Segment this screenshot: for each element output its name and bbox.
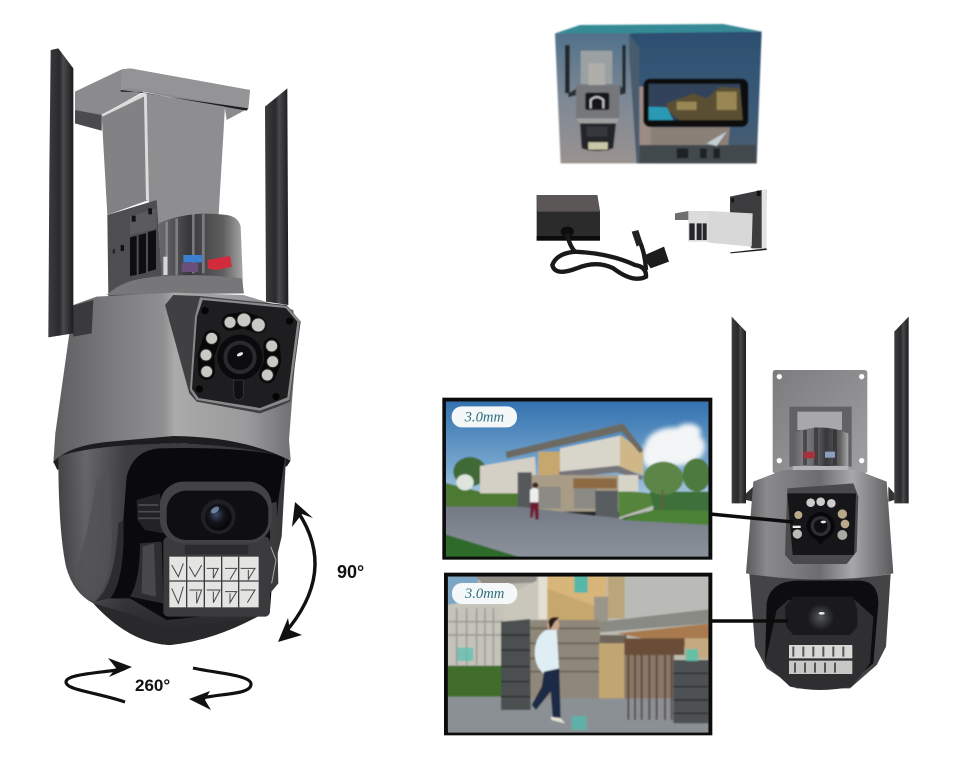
upper lens [217, 335, 263, 400]
left antenna [48, 48, 93, 337]
main camera: dual lens PTZ [48, 48, 301, 645]
front glass dome [793, 427, 848, 477]
box side face [555, 33, 639, 163]
adapter block [537, 195, 600, 241]
lower telephoto lens housing [160, 482, 272, 617]
label: 260°: 260° [135, 676, 170, 695]
ground [443, 697, 712, 737]
box camera picture [565, 45, 626, 151]
person near [532, 617, 565, 723]
front wall plate [773, 370, 867, 473]
box building picture [639, 127, 757, 163]
power adapter and cable [537, 195, 669, 279]
power plug [643, 247, 669, 268]
product box [555, 24, 762, 163]
connector line: bottom lens to zoomed view [712, 619, 788, 623]
front lower dome [749, 574, 891, 690]
infrared LEDs [200, 313, 279, 381]
connector line: top lens to wide view [710, 514, 793, 522]
box top flap [555, 24, 762, 34]
upper wide-angle camera module [165, 295, 301, 413]
box front face [630, 32, 762, 163]
white LED floodlight panel [169, 557, 259, 607]
LED backing [206, 320, 273, 375]
box smartphone picture [643, 79, 748, 127]
focal length badge top [452, 406, 517, 427]
right antenna [265, 88, 288, 305]
power cable [552, 233, 646, 279]
panel: zoomed view 3.0mm [443, 573, 712, 737]
wall mount bracket [75, 68, 250, 297]
label: 90°: 90° [337, 562, 364, 582]
panel: wide view 3.0mm [443, 398, 712, 560]
upper body housing [53, 293, 297, 470]
lower rotating dome [58, 443, 286, 645]
tilt arrow: 90 degrees [278, 502, 364, 642]
pan arrows: 260 degrees [66, 658, 251, 710]
front upper body [746, 470, 893, 580]
glass dome with indicator lights [107, 214, 244, 295]
spare mounting bracket [675, 189, 767, 253]
zoomed scene: gate and walking person [443, 573, 712, 737]
front upper module [785, 483, 858, 564]
focal length badge top: 3.0mm [464, 409, 504, 425]
focal length badge bottom: 3.0mm [464, 586, 504, 602]
front antennas [732, 317, 909, 503]
focal length badge bottom [452, 583, 517, 604]
front view camera [732, 317, 909, 690]
person far [530, 482, 539, 520]
wide scene: house and street [443, 398, 712, 560]
